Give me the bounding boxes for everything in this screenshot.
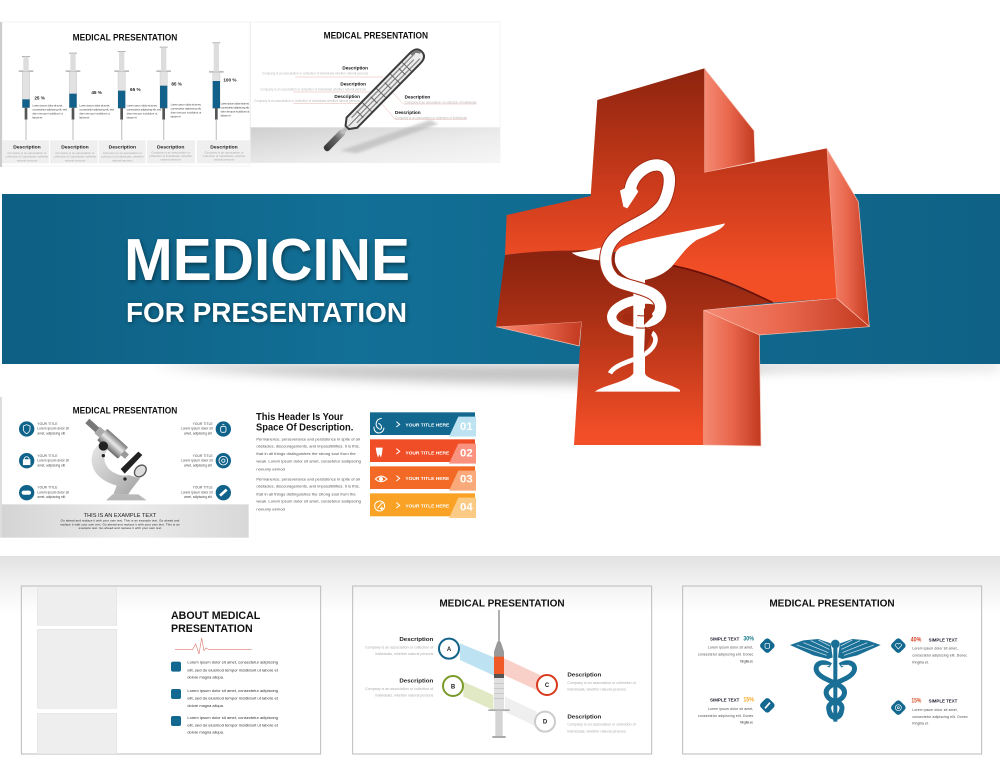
banner 01: 01 [460,421,473,433]
block top left: consectetur adipiscing elit. Donec [698,653,754,657]
left descriptions: Company is an association or collection of [365,645,434,649]
panel: thermometer slide [251,22,500,163]
heading: MEDICAL PRESENTATION [324,31,428,41]
captions left: amet, adipiscing elit. [37,463,66,467]
panel: header and banners slide [250,397,499,538]
description cards: natural persons [160,158,181,162]
block bottom left: consectetur adipiscing elit. Donec [698,714,754,718]
circle A [439,639,459,659]
percent labels: 100 % [223,78,237,83]
block bottom right: fringilla et. [912,722,929,726]
bullet text: elit, sed do eiusmod tempor incididunt ut labore et [187,667,279,672]
bullet text: dolore magna aliqua. [187,730,224,735]
block top right: Lorem ipsum dolor sit amet, [912,647,958,651]
description cards: collection of individuals, whether [149,154,192,158]
thermometer shadow [340,120,438,153]
descriptions right: Company is an association or collection of individuals [405,100,477,104]
block top left: fringilla et. [740,659,753,663]
descriptions left: Company is an association or collection of individuals whether natural persons [254,99,360,103]
syringe captions: diam tempor incididunt ut [127,111,157,115]
block bottom right [911,699,968,726]
panel: teal title band [2,194,1000,364]
title: MEDICINE: MEDICINE [124,227,410,293]
subtitle: FOR PRESENTATION: FOR PRESENTATION [126,297,407,328]
description cards: collection of individuals, whether [101,155,144,159]
syringe captions: Lorem ipsum dolor sit amet, [32,103,63,107]
heading [256,412,354,433]
banner 01: YOUR TITLE HERE [405,422,449,427]
band shadow [150,364,1000,384]
description cards: natural persons [17,158,38,162]
percent labels: 85 % [171,82,183,87]
captions left: Lorem ipsum dolor sit [37,459,69,463]
left descriptions: Description [399,637,433,643]
percent labels [34,78,237,100]
paragraph one: nonumy eirmod [256,467,285,471]
captions right: Lorem ipsum dolor sit [181,490,213,494]
captions left: Lorem ipsum dolor sit [37,490,69,494]
right descriptions: Description [567,673,601,679]
paragraph one [256,437,361,471]
right descriptions [567,673,637,733]
description cards [2,140,250,163]
example text: Go ahead and replace it with your own text. This is an example text. Go ahead and [61,519,180,523]
banner 02: 02 [460,447,473,459]
syringe captions: consectetur adipiscing elit, [221,106,249,110]
syringe captions: Lorem ipsum dolor sit amet, [171,103,201,107]
paragraph one: that in all things distinguishes the strong soul from the [256,452,356,456]
block bottom right: Lorem ipsum dolor sit amet, [912,708,958,712]
heading [171,610,261,635]
description cards: Company is an association or [204,150,244,154]
heartbeat line [175,638,252,654]
paragraph one: obstacles, discouragements, and impossibilities. It is this, [256,445,360,449]
example text: replace it with your own text. Go ahead and replace it with your own text. This is an [60,522,180,526]
left descriptions: individuals, whether natural persons [375,694,433,698]
strip [2,504,249,538]
caduceus [790,639,881,722]
circle C: C [545,683,550,689]
heading: Space Of Description. [256,422,354,433]
block top left [698,636,755,663]
syringe 100 percent [209,42,224,140]
icon glyphs [765,643,902,711]
block bottom left [698,697,755,725]
bullet text: Lorem ipsum dolor sit amet, consectetur adipiscing [187,715,278,720]
block top left: Lorem ipsum dolor sit amet, [708,646,753,650]
bullet text: dolore magna aliqua. [187,703,224,708]
left descriptions [365,637,434,698]
bullet text: elit, sed do eiusmod tempor incididunt ut labore et [187,695,279,700]
main slide sheet [0,0,1000,556]
block bottom left: SIMPLE TEXT [710,698,740,703]
circle D [535,712,555,732]
circle A: A [447,647,452,653]
background below main slide [0,556,1000,614]
description cards: Company is an association or [7,151,47,155]
description cards: collection of individuals, whether [54,155,96,159]
captions left: YOUR TITLE [37,422,57,426]
block top right [911,637,967,664]
banner 03 [370,466,476,491]
descriptions right [395,95,477,120]
captions right: YOUR TITLE [193,454,213,458]
captions right: amet, adipiscing elit. [184,431,213,435]
paragraph two [256,477,361,511]
icon glyphs [22,424,228,496]
example text: THIS IS AN EXAMPLE TEXT [84,513,157,519]
block bottom right: consectetur adipiscing elit. Donec [912,715,968,719]
syringe captions: consectetur adipiscing elit, sed [79,107,114,111]
captions right: YOUR TITLE [193,486,213,490]
description cards: Company is an association or [103,151,142,155]
syringe captions: labore et [79,115,89,119]
circle B: B [451,684,456,690]
syringe captions: diam tempor incididunt ut [79,111,110,115]
percent labels: 25 % [34,95,46,100]
right descriptions: Description [567,714,601,720]
bullet text: Lorem ipsum dolor sit amet, consectetur adipiscing [187,688,278,693]
floor [251,127,500,163]
right descriptions: Company is an association or collection of [567,723,637,727]
syringe 85 percent [156,47,171,140]
example text: example text. Go ahead and replace it with your own text [79,526,161,530]
panel: microscope slide [0,397,249,538]
captions right: YOUR TITLE [193,422,213,426]
description cards: Description [109,145,136,151]
descriptions right: Description [395,110,421,115]
cross side faces [496,68,869,446]
captions right: amet, adipiscing elit. [184,463,213,467]
captions right [181,422,213,499]
heading: PRESENTATION [171,623,253,635]
description cards: natural persons [112,158,133,162]
syringe captions: diam tempor incididunt ut [221,110,249,114]
description cards: Company is an association or [151,150,190,154]
description cards: Company is an association or [55,151,95,155]
descriptions left: Description [334,94,360,99]
banner 04: YOUR TITLE HERE [405,503,449,508]
description cards: natural persons [214,158,235,162]
right descriptions: individuals, whether natural persons [567,729,626,733]
descriptions left: Company is an association or collection of individuals whether natural persons [262,71,368,75]
syringe 45 percent [66,53,80,140]
panel: caduceus slide [683,586,982,754]
block top right: SIMPLE TEXT [929,638,958,643]
syringe captions: Lorem ipsum dolor sit amet, [221,102,249,106]
bullet text: Lorem ipsum dolor sit amet, consectetur adipiscing [187,660,278,665]
heading: MEDICAL PRESENTATION [73,405,177,415]
description cards: Description [210,144,238,150]
left descriptions: Description [399,679,433,685]
bullet text [187,660,279,735]
captions left: Lorem ipsum dolor sit [37,427,69,431]
syringe captions [32,102,249,119]
banner 02: YOUR TITLE HERE [405,450,449,455]
description cards: natural persons [65,158,86,162]
circle D: D [543,720,548,726]
paragraph two: weak. Lorem ipsum dolor sit amet, consetetur sadipscing [256,500,361,504]
block bottom left: Lorem ipsum dolor sit amet, [708,707,753,711]
descriptions left: Description [342,66,368,71]
percent labels: 45 % [91,90,103,95]
captions left: amet, adipiscing elit. [37,431,66,435]
syringe captions: diam tempor incididunt ut [171,111,201,115]
description cards: collection of individuals, whether [6,155,48,159]
captions left: YOUR TITLE [37,486,57,490]
block top left: 30% [743,636,755,642]
heading: MEDICAL PRESENTATION [439,599,565,610]
block bottom right: 15% [911,699,922,705]
diamond icons [759,637,907,716]
heading: MEDICAL PRESENTATION [769,599,895,610]
descriptions right: Company is an association or collection of individuals [395,116,467,120]
right descriptions: Company is an association or collection of [567,681,637,685]
banner 03: YOUR TITLE HERE [405,476,449,481]
panel: syringes slide [0,22,250,167]
description cards: Description [61,145,89,151]
banner 01 [370,412,476,437]
bowl of hygieia symbol [572,165,725,392]
paragraph one: weak. Lorem ipsum dolor sit amet, consetetur sadipscing [256,460,361,464]
heading: MEDICAL PRESENTATION [73,32,177,42]
paragraph two: that in all things distinguishes the strong soul from the [256,492,356,496]
syringe captions: labore et [127,115,137,119]
syringe 25 percent [19,56,33,140]
captions right: Lorem ipsum dolor sit [181,427,213,431]
central syringe [488,610,510,738]
cross front lower face [496,247,773,445]
paragraph two: obstacles, discouragements, and impossibilities. It is this, [256,485,360,489]
paragraph two: nonumy eirmod [256,507,285,511]
heading: This Header Is Your [256,412,344,423]
descriptions left [254,66,368,103]
panel: syringe ABCD slide [353,586,652,754]
percent labels: 65 % [130,87,141,92]
panel: about medical slide [21,586,321,754]
descriptions right: Description [405,95,430,100]
syringe captions: Lorem ipsum dolor sit amet, [127,103,157,107]
syringe captions: labore et [221,114,231,118]
paragraph one: Permanence, perseverance and persistence in spite of all [256,437,360,441]
bullet text: elit, sed do eiusmod tempor incididunt ut labore et [187,722,279,727]
syringe captions: labore et [32,115,42,119]
leader lines [293,77,477,119]
syringe captions: consectetur adipiscing elit, [171,107,201,111]
left descriptions: individuals, whether natural persons [375,652,433,656]
captions right: amet, adipiscing elit. [184,495,213,499]
descriptions left: Description [340,81,366,86]
paragraph two: Permanence, perseverance and persistence in spite of all [256,477,360,481]
syringe 65 percent [114,51,129,140]
description cards: collection of individuals, whether [203,154,245,158]
captions left: YOUR TITLE [37,454,57,458]
block bottom right: SIMPLE TEXT [929,699,958,704]
bullet text: dolore magna aliqua. [187,675,224,680]
ribbons [460,643,540,727]
block top left: SIMPLE TEXT [710,637,740,642]
cross front upper face [505,68,837,303]
captions left [37,422,69,499]
block top right: fringilla et. [912,660,929,664]
syringe captions: Lorem ipsum dolor sit amet, [79,103,110,107]
syringe captions: labore et [171,115,181,119]
bullet markers [171,662,181,726]
microscope [82,415,149,500]
red pharmacy cross [496,68,869,446]
image placeholders [37,587,117,754]
syringe captions: consectetur adipiscing elit, sed [32,107,67,111]
description cards: Description [157,144,184,150]
icons left [19,421,231,500]
syringe captions: diam tempor incididunt ut [32,111,63,115]
banner 02 [370,439,476,464]
banner 04: 04 [460,501,473,513]
circle C [537,675,557,695]
block bottom left: 15% [743,697,755,703]
heading: ABOUT MEDICAL [171,610,261,622]
banner 04 [370,493,476,518]
captions right: Lorem ipsum dolor sit [181,459,213,463]
syringe captions: consectetur adipiscing elit, sed [127,107,162,111]
example text [60,513,180,530]
left descriptions: Company is an association or collection of [365,687,434,691]
thermometer [320,46,427,155]
circle B [443,676,463,696]
block top right: 40% [911,637,922,643]
descriptions left: Company is an association or collection of individuals whether natural persons [260,88,366,92]
block bottom left: fringilla et. [740,721,753,725]
banner 03: 03 [460,474,473,486]
block top right: consectetur adipiscing elit. Donec [912,654,967,658]
crease shadow [673,266,773,303]
description cards: Description [13,145,41,151]
right descriptions: individuals, whether natural persons [567,688,626,692]
captions left: amet, adipiscing elit. [37,495,66,499]
